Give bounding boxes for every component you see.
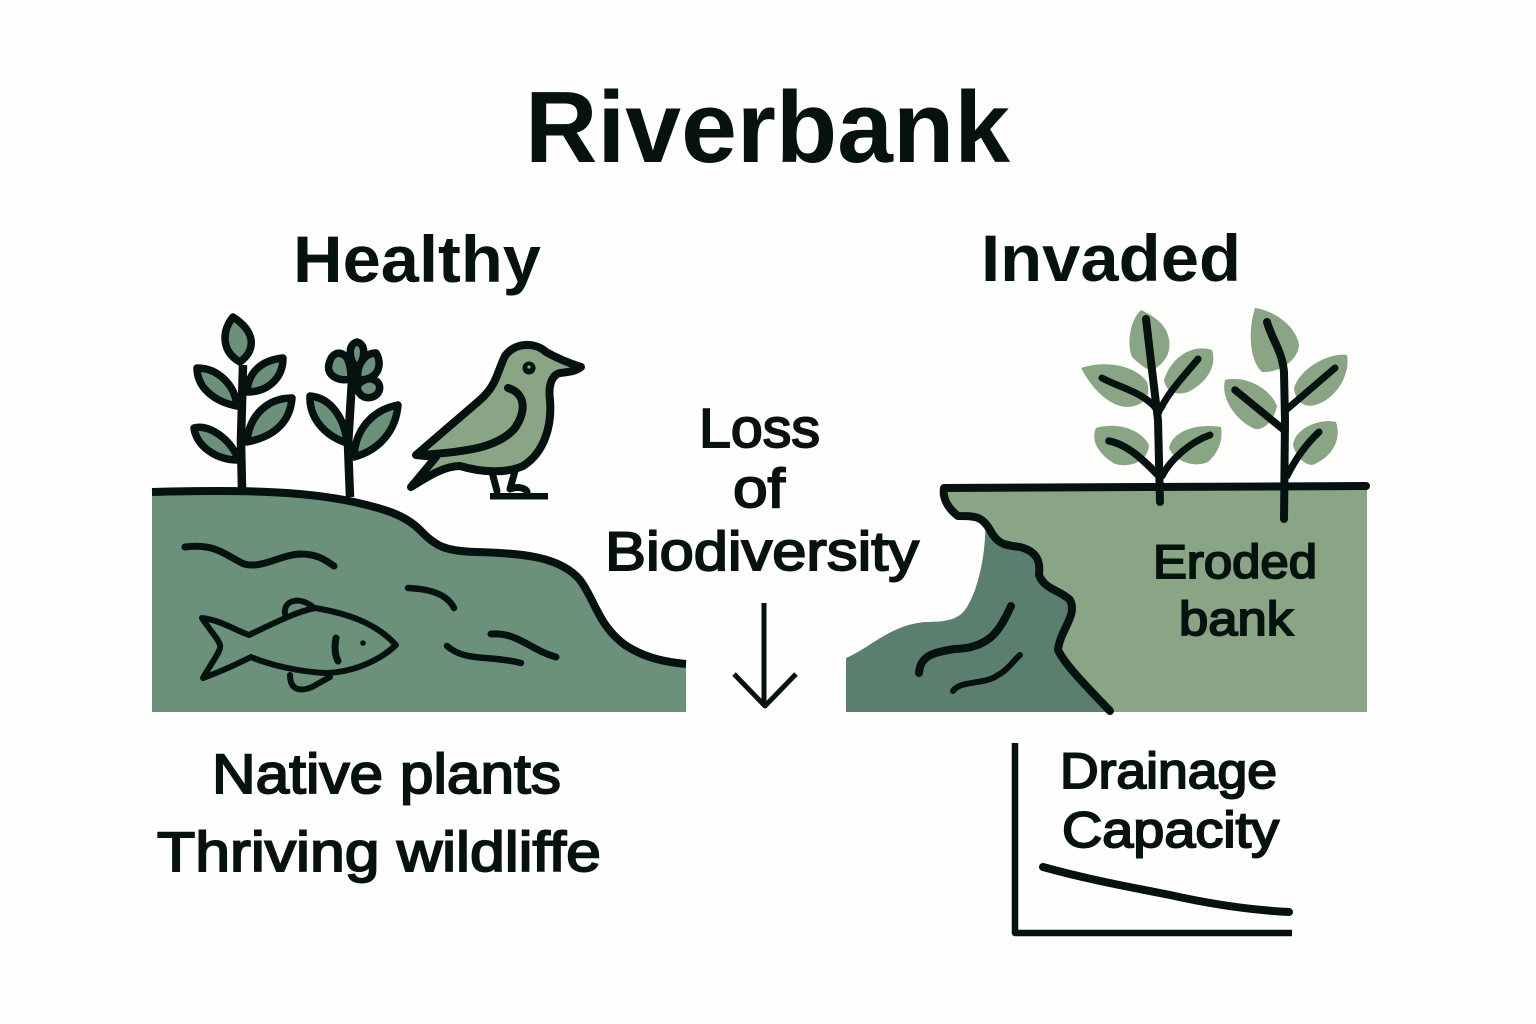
icon: native plant with leaves xyxy=(194,317,292,490)
text block: native plants, thriving wildlife: Native plants xyxy=(212,742,561,805)
healthy bank ground xyxy=(152,491,686,712)
text block: native plants, thriving wildlife: Thriving wildliffe xyxy=(157,820,601,883)
eroded dark slope xyxy=(846,515,1120,712)
label: eroded bank: Eroded xyxy=(1153,535,1317,588)
heading: invaded: Invaded xyxy=(981,221,1241,295)
root line 2 xyxy=(953,655,1020,691)
panel: invaded riverbank xyxy=(846,308,1367,712)
callout: loss of biodiversity xyxy=(605,397,920,582)
water ripple 3 xyxy=(491,634,556,657)
text block: native plants, thriving wildlife xyxy=(157,742,601,883)
arrow: down xyxy=(734,603,796,706)
icon: native flower xyxy=(310,342,398,497)
label: eroded bank xyxy=(1153,535,1317,645)
chart label xyxy=(1060,743,1279,858)
icon: bird xyxy=(411,345,581,500)
root line 1 xyxy=(919,606,1011,673)
water ripple 4 xyxy=(447,646,521,663)
chart axes xyxy=(1015,743,1292,933)
chart trend line xyxy=(1043,867,1289,912)
panel: healthy riverbank xyxy=(152,317,686,712)
callout: loss of biodiversity: of xyxy=(733,457,786,519)
bank outline xyxy=(152,491,686,664)
water ripple 2 xyxy=(408,588,454,608)
callout: loss of biodiversity: Biodiversity xyxy=(605,520,920,582)
icon: invasive plant right xyxy=(1224,308,1348,519)
heading: healthy: Healthy xyxy=(293,222,541,296)
water ripple 1 xyxy=(185,546,334,566)
icon: invasive plant left xyxy=(1081,310,1221,502)
label: eroded bank: bank xyxy=(1179,592,1294,645)
bank outline xyxy=(944,486,1366,711)
title: Riverbank xyxy=(525,72,1011,184)
icon: fish xyxy=(202,601,396,689)
chart label: Drainage xyxy=(1060,743,1277,799)
callout: loss of biodiversity: Loss xyxy=(699,397,820,459)
eroded bank ground xyxy=(944,487,1367,712)
chart: drainage capacity xyxy=(1015,743,1292,933)
chart label: Capacity xyxy=(1062,802,1279,858)
